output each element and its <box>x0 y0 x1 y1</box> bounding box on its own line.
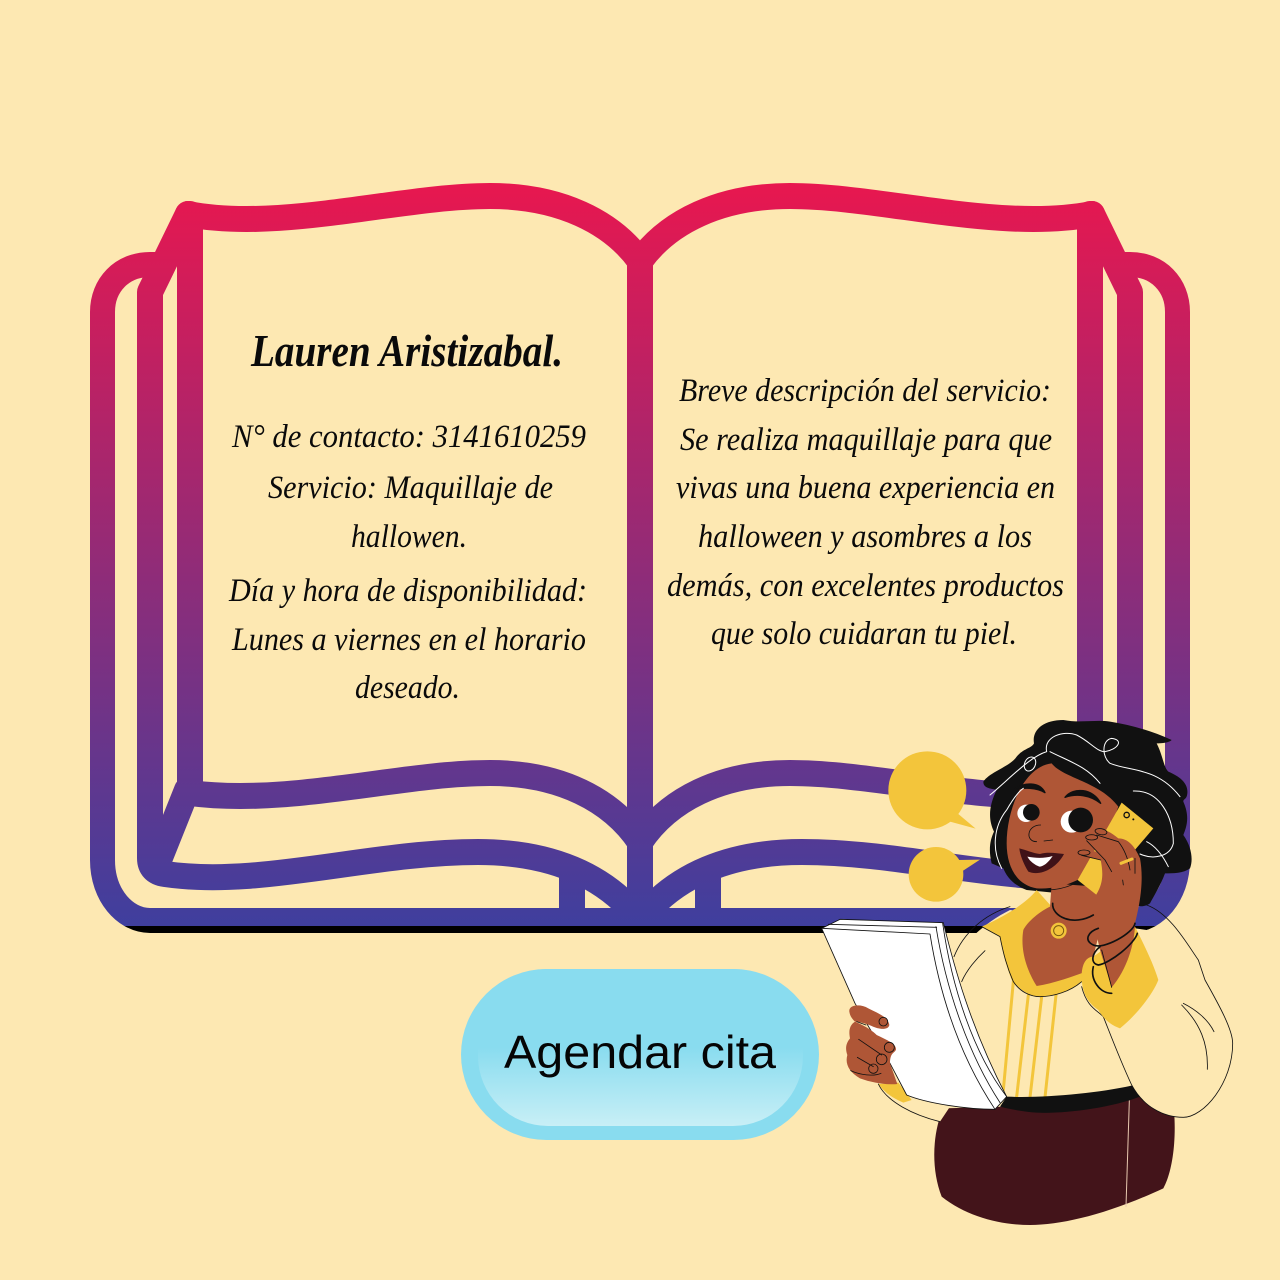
skirt seam <box>1126 1101 1129 1207</box>
bracelets <box>1088 923 1137 993</box>
open book icon <box>102 196 1178 926</box>
left arm sleeve <box>878 1082 950 1122</box>
phone <box>1078 803 1153 895</box>
left hand <box>846 1005 897 1084</box>
contact and service details <box>228 419 587 706</box>
belt <box>1000 1086 1140 1113</box>
left page strokes <box>150 196 640 925</box>
name heading: Lauren Aristizabal. <box>250 326 563 376</box>
infographic canvas <box>90 183 1234 1225</box>
necklace <box>1051 903 1093 939</box>
mouth <box>1019 848 1064 873</box>
papers held in hand <box>822 919 1007 1109</box>
collar and neckline <box>982 890 1093 997</box>
right page service description: que solo cuidaran tu piel. <box>711 616 1017 652</box>
blouse <box>952 907 1147 1098</box>
contact and service details: N° de contacto: 3141610259 <box>231 419 586 455</box>
collar outline <box>982 927 1082 997</box>
right hand and forearm <box>1078 828 1142 987</box>
cover bottom shadow <box>124 926 1156 933</box>
illustration: woman on the phone holding papers <box>822 720 1233 1225</box>
eyebrows <box>1013 784 1101 803</box>
neck and chest <box>1022 883 1103 986</box>
skirt <box>934 1097 1175 1225</box>
right page service description: halloween y asombres a los <box>698 519 1032 555</box>
right page service description: Se realiza maquillaje para que <box>680 422 1052 458</box>
right page service description: demás, con excelentes productos <box>667 568 1064 604</box>
nose <box>1029 825 1053 842</box>
contact and service details: Servicio: Maquillaje de <box>268 470 553 506</box>
right sleeve <box>1082 905 1233 1117</box>
face <box>1007 763 1118 889</box>
button: agendar cita: Agendar cita <box>504 1026 776 1078</box>
right page service description: vivas una buena experiencia en <box>676 470 1055 506</box>
pages wrapper <box>150 196 1130 926</box>
book spine <box>627 262 653 926</box>
contact and service details: deseado. <box>355 670 460 706</box>
eyes <box>1017 804 1093 833</box>
right page service description <box>667 373 1064 652</box>
contact and service details: hallowen. <box>351 519 467 555</box>
speech bubble large <box>888 751 976 829</box>
contact and service details: Lunes a viernes en el horario <box>231 622 586 658</box>
right page strokes <box>640 196 1130 925</box>
book cover outline <box>102 264 1178 920</box>
left page text <box>228 326 587 706</box>
right page service description: Breve descripción del servicio: <box>679 373 1051 409</box>
right cuff <box>1082 927 1158 1028</box>
jaw and neck lines <box>1048 882 1078 890</box>
contact and service details: Día y hora de disponibilidad: <box>228 573 587 609</box>
button: agendar cita <box>461 969 819 1140</box>
hair curl loop <box>1022 755 1038 773</box>
speech bubble small <box>909 847 980 902</box>
hair highlights <box>990 733 1180 868</box>
hair <box>983 720 1192 906</box>
blouse stripes <box>1003 982 1056 1097</box>
